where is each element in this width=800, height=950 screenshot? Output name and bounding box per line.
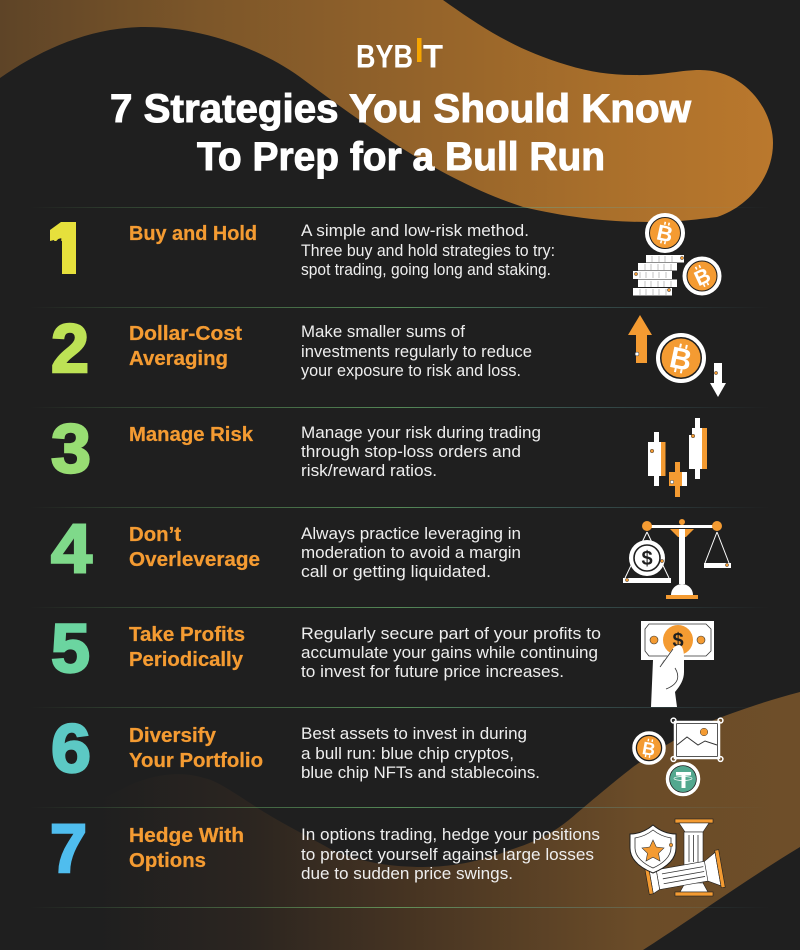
description 2: your exposure to risk and loss. <box>301 362 521 380</box>
heading: Take Profits Periodically <box>129 624 245 671</box>
description 1 <box>301 222 555 279</box>
description 1: spot trading, going long and staking. <box>301 261 551 279</box>
logo: Bybit: BYB <box>356 38 413 74</box>
heading: Take Profits Periodically: Take Profits <box>129 624 245 646</box>
description 6 <box>301 725 540 782</box>
description 2 <box>301 323 532 380</box>
icon: coins and bar stack <box>633 215 720 296</box>
icon: coin with up and down arrows: B <box>667 341 695 378</box>
description 4: call or getting liquidated. <box>301 563 491 581</box>
title <box>110 87 692 179</box>
description 7: In options trading, hedge your positions <box>301 826 600 844</box>
heading: Buy and Hold: Buy and Hold <box>129 223 257 245</box>
number 7: 7 <box>50 810 87 887</box>
description 7: to protect yourself against large losses <box>301 846 594 864</box>
heading: Hedge With Options: Options <box>129 850 206 872</box>
description 1: Three buy and hold strategies to try: <box>301 242 555 260</box>
title: 7 Strategies You Should Know <box>110 87 692 131</box>
description 7: due to sudden price swings. <box>301 865 513 883</box>
icon: balance scale: $ <box>641 548 653 570</box>
panel: strategy 6 <box>51 710 723 794</box>
description 3: Manage your risk during trading <box>301 424 541 442</box>
number 5: 5 <box>51 610 90 687</box>
panel: strategy 1 <box>42 211 720 296</box>
description 2: investments regularly to reduce <box>301 343 532 361</box>
number 6: 6 <box>51 710 91 787</box>
description 1: A simple and low-risk method. <box>301 222 529 240</box>
description 4: Always practice leveraging in <box>301 525 521 543</box>
heading: Diversify Your Portfolio: Diversify <box>129 725 217 747</box>
heading: Don't Overleverage <box>129 524 260 571</box>
panel: strategy 3 <box>51 410 707 497</box>
icon: bitcoin, NFT picture and tether: B <box>641 738 657 760</box>
icon: coin with up and down arrows <box>628 315 726 397</box>
heading: Dollar-Cost Averaging: Dollar-Cost <box>129 323 242 345</box>
background blob: bottom <box>0 692 800 950</box>
description 4: moderation to avoid a margin <box>301 544 521 562</box>
icon: hand holding banknote <box>641 621 714 707</box>
number 3: 3 <box>51 410 91 487</box>
description 5 <box>301 625 601 681</box>
heading: Diversify Your Portfolio <box>129 725 263 772</box>
heading: Dollar-Cost Averaging <box>129 323 242 370</box>
icon: balance scale <box>623 519 731 599</box>
panel: strategy 5 <box>51 610 714 707</box>
description 4 <box>301 525 521 581</box>
number 1: 1 <box>52 211 76 288</box>
description 6: Best assets to invest in during <box>301 725 527 743</box>
description 3 <box>301 424 541 480</box>
heading: Hedge With Options <box>129 825 244 872</box>
background blob: top <box>0 0 773 222</box>
panel: strategy 2 <box>51 310 726 397</box>
icon: coins and bar stack: B <box>691 264 714 291</box>
number 2: 2 <box>51 310 89 387</box>
icon: shield and columns <box>630 819 725 900</box>
panel: strategy 7 <box>50 810 725 900</box>
heading: Hedge With Options: Hedge With <box>129 825 244 847</box>
description 6: blue chip NFTs and stablecoins. <box>301 764 540 782</box>
panel: strategy 4 <box>51 510 731 599</box>
description 5: to invest for future price increases. <box>301 663 564 681</box>
number 4: 4 <box>51 510 92 587</box>
heading: Manage Risk: Manage Risk <box>129 424 254 446</box>
description 5: accumulate your gains while continuing <box>301 644 598 662</box>
heading: Diversify Your Portfolio: Your Portfolio <box>129 750 263 772</box>
logo: Bybit: T <box>423 38 443 74</box>
description 3: risk/reward ratios. <box>301 462 437 480</box>
heading: Don't Overleverage: Don’t <box>129 524 181 546</box>
icon: hand holding banknote: $ <box>672 630 684 652</box>
title: To Prep for a Bull Run <box>197 135 605 179</box>
heading: Don't Overleverage: Overleverage <box>129 549 260 571</box>
description 3: through stop-loss orders and <box>301 443 521 461</box>
description 2: Make smaller sums of <box>301 323 465 341</box>
heading: Take Profits Periodically: Periodically <box>129 649 244 671</box>
description 7 <box>301 826 600 883</box>
icon: coins and bar stack: B <box>655 220 675 247</box>
heading: Dollar-Cost Averaging: Averaging <box>129 348 228 370</box>
icon: bitcoin, NFT picture and tether <box>634 718 723 794</box>
icon: candlesticks <box>648 418 707 497</box>
description 5: Regularly secure part of your profits to <box>301 625 601 643</box>
description 6: a bull run: blue chip cryptos, <box>301 745 514 763</box>
